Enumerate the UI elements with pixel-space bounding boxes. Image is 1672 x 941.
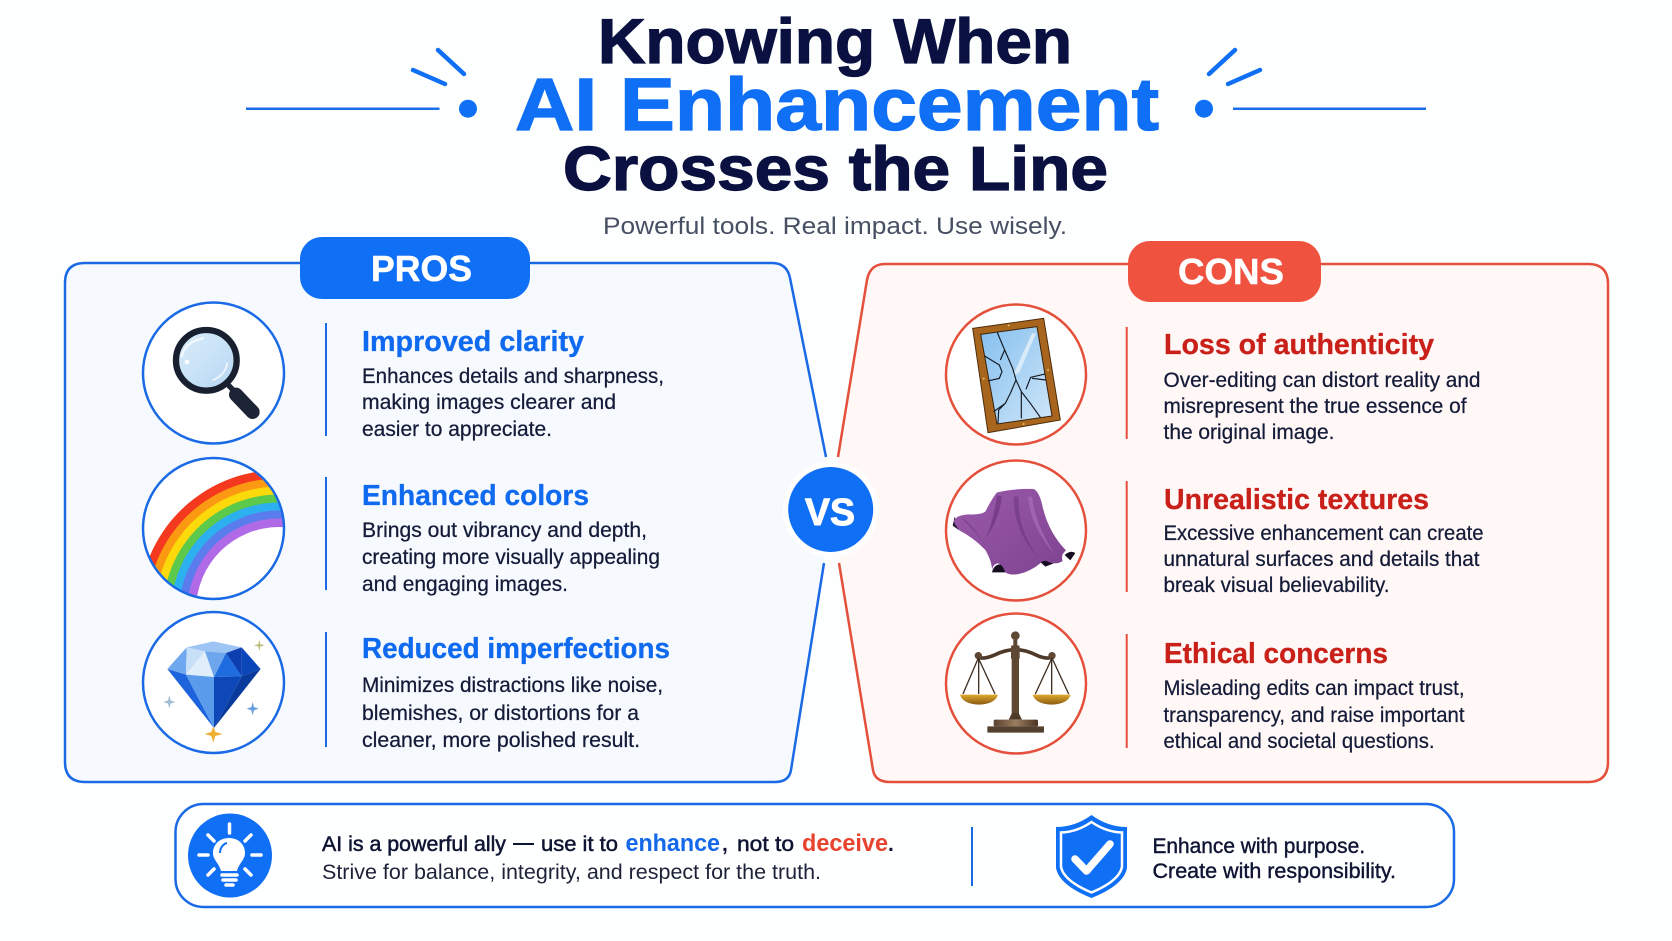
callout message: , — [722, 833, 728, 856]
description: Enhances details and sharpness, — [362, 364, 664, 388]
description: break visual believability. — [1164, 573, 1390, 597]
icon: cracked mirror — [946, 304, 1086, 444]
heading: Loss of authenticity — [1164, 329, 1434, 361]
callout message: enhance — [626, 830, 720, 857]
icon: balance scales — [946, 614, 1086, 754]
title line: Crosses the Line: Crosses the Line — [563, 135, 1108, 204]
subtitle: Powerful tools. Real impact. Use wisely. — [603, 213, 1067, 240]
left title accent — [246, 50, 477, 118]
callout message: . — [888, 833, 894, 856]
callout message: AI is a powerful ally — [322, 833, 506, 856]
vs badge — [783, 462, 879, 558]
panel: cons — [838, 241, 1608, 782]
vs badge: VS — [805, 492, 855, 534]
cons badge: CONS — [1178, 251, 1284, 292]
icon: shield with check — [1056, 815, 1127, 898]
description — [1164, 676, 1465, 753]
callout message: use it to — [541, 833, 618, 856]
description: and engaging images. — [362, 572, 568, 596]
description — [362, 364, 664, 441]
item: ethical concerns — [946, 614, 1465, 754]
item: improved clarity — [143, 302, 664, 444]
panel: pros — [65, 237, 826, 782]
heading: Improved clarity — [362, 326, 584, 358]
description: making images clearer and — [362, 390, 616, 414]
closing statement — [1152, 835, 1396, 883]
description — [1164, 368, 1480, 444]
description: ethical and societal questions. — [1164, 729, 1434, 753]
heading: Reduced imperfections — [362, 633, 670, 665]
callout message — [322, 830, 894, 884]
description: Minimizes distractions like noise, — [362, 673, 663, 697]
description — [362, 673, 663, 752]
bottom callout bar — [176, 804, 1454, 907]
heading: Ethical concerns — [1164, 638, 1388, 670]
description — [1164, 521, 1484, 597]
title — [515, 7, 1159, 204]
title line: AI Enhancement: AI Enhancement — [515, 63, 1159, 146]
description: misrepresent the true essence of — [1164, 394, 1467, 418]
description: easier to appreciate. — [362, 417, 552, 441]
description: Misleading edits can impact trust, — [1164, 676, 1464, 700]
right title accent — [1195, 50, 1426, 118]
heading: Unrealistic textures — [1164, 484, 1429, 516]
description: the original image. — [1164, 420, 1334, 444]
icon: diamond — [143, 612, 284, 753]
cons badge — [1128, 241, 1321, 302]
callout message: deceive — [802, 830, 888, 857]
description: transparency, and raise important — [1164, 703, 1465, 727]
icon: draped cloth — [946, 460, 1086, 600]
heading: Enhanced colors — [362, 480, 589, 512]
description: creating more visually appealing — [362, 545, 660, 569]
description: Excessive enhancement can create — [1164, 521, 1484, 545]
item: reduced imperfections — [143, 612, 670, 753]
icon: rainbow — [142, 456, 286, 600]
closing statement: Enhance with purpose. — [1152, 835, 1365, 858]
pros badge: PROS — [371, 248, 472, 289]
title line: Knowing When: Knowing When — [598, 7, 1072, 77]
description — [362, 518, 660, 596]
item: unrealistic textures — [946, 460, 1484, 600]
description: Over-editing can distort reality and — [1164, 368, 1480, 392]
closing statement: Create with responsibility. — [1152, 860, 1396, 883]
icon: magnifying glass — [143, 302, 284, 444]
description: blemishes, or distortions for a — [362, 701, 639, 725]
pros badge — [300, 237, 530, 299]
description: unnatural surfaces and details that — [1164, 547, 1480, 571]
item: loss of authenticity — [946, 304, 1480, 444]
item: enhanced colors — [142, 456, 659, 600]
description: cleaner, more polished result. — [362, 728, 640, 752]
icon: light bulb — [188, 814, 272, 898]
callout message: Strive for balance, integrity, and respect for the truth. — [322, 861, 821, 884]
description: Brings out vibrancy and depth, — [362, 518, 647, 542]
callout message: not to — [737, 833, 794, 856]
